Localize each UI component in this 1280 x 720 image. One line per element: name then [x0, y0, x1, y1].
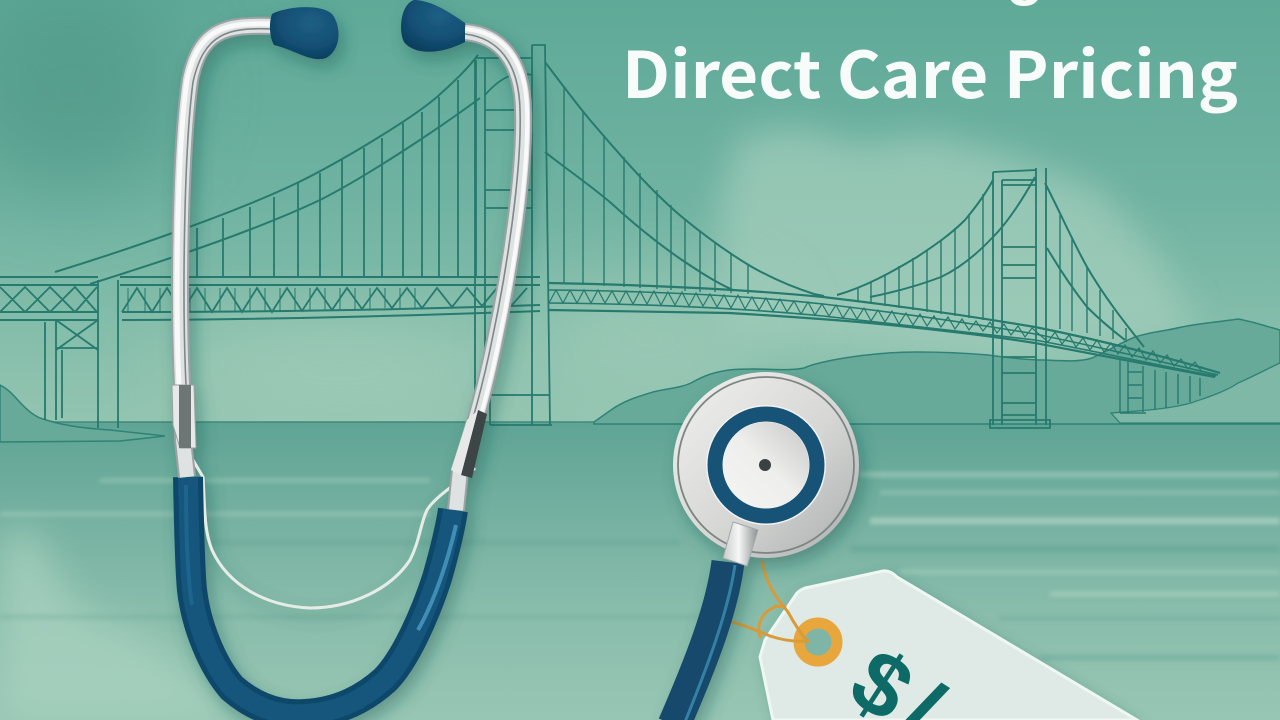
right metal tube [456, 29, 527, 510]
left metal tube [177, 24, 273, 477]
tag eyelet [799, 623, 837, 661]
main cables, left span [55, 55, 480, 284]
stethoscope headset [172, 0, 527, 714]
right tower [990, 168, 1050, 428]
hangers, left span [197, 60, 476, 276]
title [622, 0, 1238, 117]
metal stem [723, 522, 758, 566]
sky background [0, 0, 1280, 425]
bridge line drawing [0, 45, 1220, 428]
spring tube [187, 450, 475, 608]
right collar [451, 410, 487, 478]
chest piece disc [673, 372, 859, 558]
title lower line: Direct Care Pricing [622, 25, 1238, 117]
far right viaduct [1120, 360, 1200, 413]
left ear tip [270, 7, 339, 59]
price tag [760, 571, 1137, 720]
distant hills [0, 319, 1280, 442]
water [0, 422, 1280, 720]
right ear tip [401, 0, 465, 52]
blue rubber tube [186, 477, 456, 714]
blue tube to chest piece [674, 562, 735, 720]
left collar [172, 385, 196, 448]
left pier and tower [45, 280, 118, 428]
deck left section [0, 277, 540, 320]
deck right section [549, 283, 1220, 377]
back span cables [1045, 183, 1144, 347]
main cables, centre span [545, 62, 1035, 297]
chest piece tube [673, 372, 859, 720]
main left tower [475, 45, 552, 425]
tag string [728, 561, 808, 642]
tag body [760, 571, 1137, 720]
hangers, centre span [564, 87, 1126, 342]
